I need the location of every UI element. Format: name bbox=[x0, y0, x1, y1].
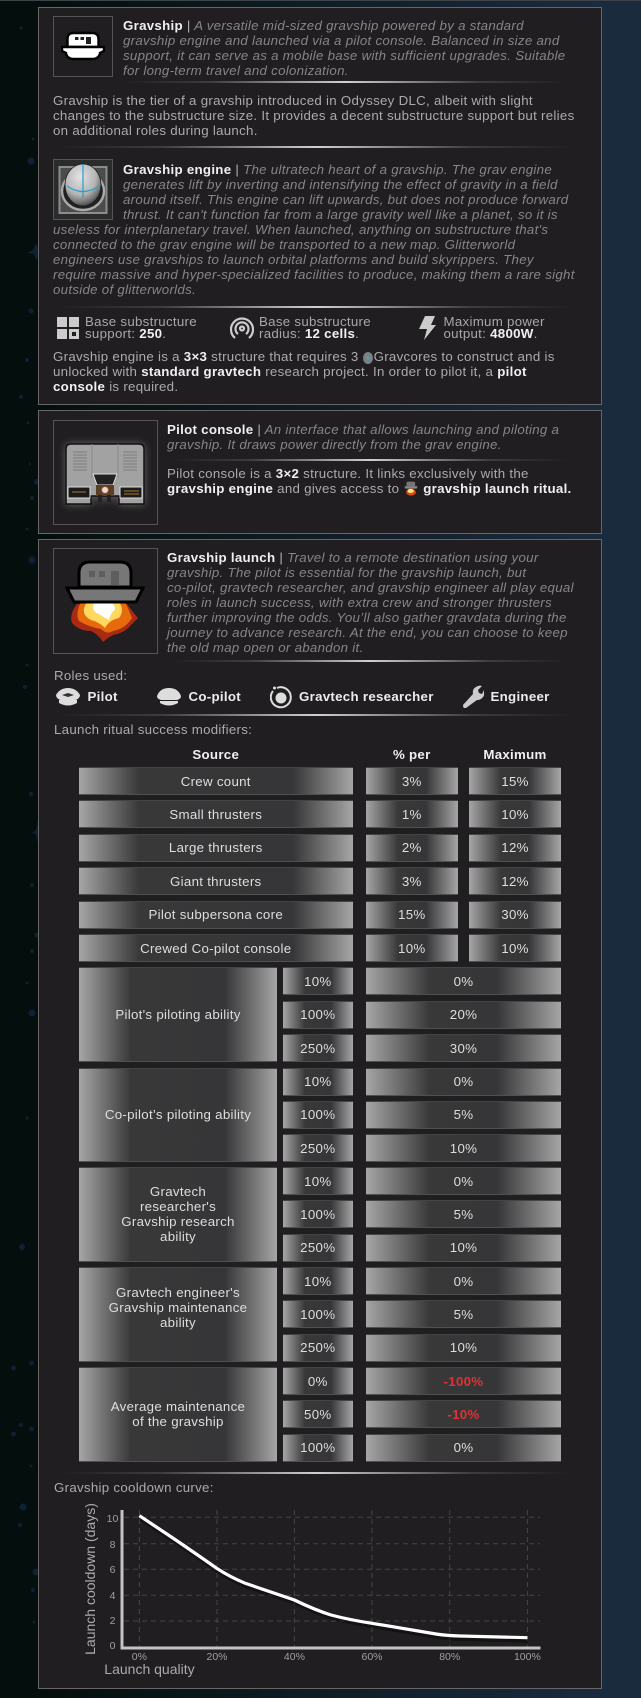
text: substructure support: support: 250. bbox=[85, 326, 166, 341]
table row: small thrusters bbox=[79, 800, 561, 828]
panel: gravship and engine bbox=[38, 7, 602, 405]
header: maximum: Maximum bbox=[483, 746, 547, 762]
table row: giant thrusters bbox=[79, 867, 561, 895]
icon: pilot console bbox=[53, 420, 158, 525]
text: cooldown curve heading: Gravship cooldown curve: bbox=[54, 1480, 214, 1494]
text: gravship engine description: connected to the grav engine will be transported to a new map. Glitterworld bbox=[53, 236, 515, 252]
line chart: launch cooldown vs launch quality: 6 bbox=[110, 1564, 116, 1576]
table group: co-pilot's piloting ability: 10% bbox=[450, 1141, 477, 1156]
table group: gravtech researcher's research ability: 10% bbox=[304, 1174, 331, 1188]
table row: crewed co-pilot console bbox=[79, 934, 561, 962]
table group: average maintenance: of the gravship bbox=[132, 1414, 224, 1429]
table group: gravtech engineer's maintenance ability: 0% bbox=[454, 1274, 473, 1288]
text: pilot: Pilot bbox=[88, 689, 118, 704]
table row: crew count bbox=[79, 767, 561, 795]
table group: gravtech researcher's research ability: 5% bbox=[454, 1207, 473, 1222]
table row: large thrusters: 2% bbox=[402, 840, 422, 855]
table group: co-pilot's piloting ability: 250% bbox=[300, 1141, 335, 1156]
table row: crewed co-pilot console: Crewed Co-pilot console bbox=[140, 940, 291, 956]
icon: substructure radius bbox=[230, 317, 254, 339]
line chart: launch cooldown vs launch quality: 8 bbox=[110, 1539, 116, 1551]
table group: gravtech engineer's maintenance ability: Gravtech engineer's bbox=[116, 1285, 240, 1300]
text: gravship tier note: Gravship is the tier of a gravship introduced in Odyssey DLC, albeit with slight bbox=[53, 92, 533, 108]
table group: co-pilot's piloting ability: 0% bbox=[454, 1074, 473, 1089]
panel: gravship launch bbox=[38, 539, 602, 1689]
table group: gravtech researcher's research ability: 0% bbox=[454, 1174, 473, 1188]
icon: gravtech researcher bbox=[270, 686, 292, 708]
table group: gravtech researcher's research ability: Gravship research bbox=[121, 1214, 235, 1229]
table group: gravtech researcher's research ability: 100% bbox=[300, 1207, 335, 1222]
table row: pilot subpersona core: 15% bbox=[398, 907, 425, 922]
text: maximum power: Maximum power bbox=[444, 314, 545, 329]
table row: crew count: 15% bbox=[501, 774, 529, 788]
table group: pilot's piloting ability: 10% bbox=[304, 974, 331, 989]
table group: pilot's piloting ability bbox=[79, 967, 561, 1062]
text: gravship launch description: gravship. The pilot is essential for the gravship launch, but bbox=[167, 564, 526, 580]
table group: co-pilot's piloting ability bbox=[79, 1068, 561, 1162]
table row: small thrusters: 1% bbox=[402, 807, 422, 822]
line chart: launch cooldown vs launch quality: 0% bbox=[132, 1651, 147, 1663]
table group: gravtech engineer's maintenance ability: 100% bbox=[300, 1307, 335, 1322]
table group: gravtech researcher's research ability: 250% bbox=[300, 1240, 335, 1255]
table row: crewed co-pilot console: 10% bbox=[501, 940, 529, 956]
table row: crew count: Crew count bbox=[181, 774, 251, 788]
text: gravship launch description: Gravship launch | Travel to a remote destination using your bbox=[167, 550, 539, 564]
text: gravship engine description: require massive and hyper-specialized facilities to produce, making them a rare sight bbox=[53, 266, 575, 282]
table group: average maintenance: -100% bbox=[444, 1374, 483, 1388]
table group: average maintenance bbox=[79, 1367, 561, 1462]
text: gravship launch description bbox=[166, 550, 574, 654]
table group: gravtech researcher's research ability bbox=[79, 1167, 561, 1262]
table row: large thrusters: Large thrusters bbox=[169, 840, 263, 855]
top edge strip bbox=[0, 0, 641, 1]
table group: gravtech engineer's maintenance ability: 250% bbox=[300, 1340, 335, 1355]
line chart: launch cooldown vs launch quality: Launch quality bbox=[104, 1661, 195, 1677]
table group: co-pilot's piloting ability: Co-pilot’s piloting ability bbox=[105, 1107, 251, 1122]
table group: co-pilot's piloting ability: 100% bbox=[300, 1107, 335, 1122]
text: gravship launch description: journey to advance research. At the end, you can choose to keep bbox=[167, 624, 568, 640]
table row: crewed co-pilot console: 10% bbox=[398, 940, 425, 956]
table row: giant thrusters: 3% bbox=[402, 874, 422, 889]
text: substructure radius: radius: 12 cells. bbox=[259, 326, 359, 341]
table group: gravtech researcher's research ability: researcher's bbox=[140, 1199, 216, 1214]
panel: pilot console bbox=[38, 410, 602, 534]
text: gravship tier note: changes to the substructure size. It provides a decent substructure support but relies bbox=[53, 108, 575, 122]
text: engine construction note bbox=[53, 348, 555, 394]
table group: pilot's piloting ability: 0% bbox=[454, 974, 473, 989]
text: pilot console description bbox=[167, 422, 559, 452]
table group: average maintenance: -10% bbox=[447, 1407, 480, 1422]
text: engine construction note: unlocked with standard gravtech research project. In order to pilot it, a pilot bbox=[53, 364, 527, 378]
line chart: launch cooldown vs launch quality: 100% bbox=[514, 1651, 541, 1663]
table group: gravtech engineer's maintenance ability: Gravship maintenance bbox=[109, 1300, 247, 1315]
text: gravship engine description: Gravship engine | The ultratech heart of a gravship. The grav engine bbox=[123, 162, 552, 176]
text: gravship launch description: roles in launch success, with extra crew and stronger thrusters bbox=[167, 594, 552, 610]
table row: large thrusters bbox=[79, 834, 561, 862]
text: pilot console description: gravship. It draws power directly from the grav engine. bbox=[167, 436, 502, 452]
table group: gravtech researcher's research ability: Gravtech bbox=[150, 1184, 206, 1199]
icon: pilot cap bbox=[56, 688, 80, 706]
table group: pilot's piloting ability: 20% bbox=[450, 1007, 477, 1022]
table row: large thrusters: 12% bbox=[501, 840, 529, 855]
table group: gravtech researcher's research ability: 10% bbox=[450, 1240, 477, 1255]
text: pilot console note: Pilot console is a 3×2 structure. It links exclusively with the bbox=[167, 466, 529, 481]
text: substructure support: Base substructure bbox=[85, 314, 197, 329]
table row: pilot subpersona core bbox=[79, 901, 561, 929]
table row: giant thrusters: 12% bbox=[501, 874, 529, 889]
text: maximum power: output: 4800W. bbox=[444, 326, 538, 341]
line chart: launch cooldown vs launch quality: 80% bbox=[439, 1651, 460, 1663]
table group: gravtech engineer's maintenance ability bbox=[79, 1267, 561, 1362]
roles row bbox=[56, 686, 550, 708]
table group: average maintenance: 100% bbox=[300, 1440, 335, 1455]
text: gravship description: gravship engine and launched via a pilot console. Balanced in size and bbox=[123, 32, 560, 48]
line chart: launch cooldown vs launch quality: 40% bbox=[284, 1651, 305, 1663]
table group: co-pilot's piloting ability: 10% bbox=[304, 1074, 331, 1089]
text: gravship tier note: on additional roles during launch. bbox=[53, 122, 258, 138]
text: gravship engine description bbox=[53, 162, 575, 296]
table group: average maintenance: 50% bbox=[304, 1407, 331, 1422]
icon: engineer wrench bbox=[463, 686, 484, 708]
table group: pilot's piloting ability: 100% bbox=[300, 1007, 335, 1022]
line chart: launch cooldown vs launch quality: 20% bbox=[206, 1651, 228, 1663]
line chart: launch cooldown vs launch quality: 4 bbox=[110, 1590, 116, 1602]
text: gravship launch description: co-pilot, gravtech researcher, and gravship engineer all play equal bbox=[167, 580, 574, 594]
text: gravship description: for long-term travel and colonization. bbox=[123, 62, 349, 78]
text: co-pilot: Co-pilot bbox=[188, 689, 241, 704]
text: engine construction note: Gravship engine is a 3×3 structure that requires 3 Gravcores to construct and is bbox=[53, 348, 555, 364]
text: maximum power bbox=[444, 314, 545, 341]
text: gravship launch description: further improving the odds. You’ll also gather gravdata during the bbox=[167, 610, 567, 624]
line chart: launch cooldown vs launch quality: 10 bbox=[107, 1513, 118, 1525]
table group: gravtech engineer's maintenance ability: ability bbox=[160, 1315, 196, 1330]
line chart: launch cooldown vs launch quality: 60% bbox=[361, 1651, 383, 1663]
icon: gravship bbox=[53, 16, 113, 77]
text: success modifiers heading: Launch ritual success modifiers: bbox=[54, 722, 252, 736]
text: gravship engine description: engineers use gravships to launch orbital platforms and build skyrippers. They bbox=[53, 252, 534, 266]
text: gravship engine description: generates lift by inverting and intensifying the effect of gravity in a field bbox=[123, 176, 558, 192]
table header bbox=[192, 746, 547, 762]
icon: co-pilot cap bbox=[157, 688, 181, 706]
text: gravship description bbox=[123, 18, 565, 78]
text: gravtech researcher: Gravtech researcher bbox=[299, 689, 434, 704]
table row: pilot subpersona core: 30% bbox=[501, 907, 529, 922]
text: gravship launch description: the old map open or abandon it. bbox=[167, 640, 363, 654]
table group: average maintenance: 0% bbox=[454, 1440, 473, 1455]
table row: small thrusters: Small thrusters bbox=[169, 807, 262, 822]
text: pilot console note bbox=[167, 466, 572, 496]
line chart: launch cooldown vs launch quality: 0 bbox=[110, 1640, 116, 1652]
line chart: launch cooldown vs launch quality: 2 bbox=[110, 1615, 116, 1627]
text: substructure support bbox=[85, 314, 197, 341]
icon: gravship engine bbox=[53, 159, 113, 220]
table group: gravtech engineer's maintenance ability: 10% bbox=[304, 1274, 331, 1288]
icon: power bolt bbox=[419, 316, 436, 340]
table row: crew count: 3% bbox=[402, 774, 422, 788]
table group: pilot's piloting ability: Pilot's piloting ability bbox=[115, 1007, 241, 1022]
table group: pilot's piloting ability: 30% bbox=[450, 1041, 477, 1056]
text: gravship engine description: thrust. It can't function far from a large gravity well like a planet, so it is bbox=[123, 206, 558, 222]
text: gravship tier note bbox=[53, 92, 575, 138]
text: pilot console note: gravship engine and gives access to gravship launch ritual. bbox=[167, 481, 572, 496]
table group: average maintenance: Average maintenance bbox=[111, 1399, 245, 1414]
text: engine construction note: console is required. bbox=[53, 378, 178, 394]
table group: pilot's piloting ability: 250% bbox=[300, 1041, 335, 1056]
icon: gravship launch bbox=[53, 548, 158, 654]
text: gravship description: Gravship | A versatile mid-sized gravship powered by a standard bbox=[123, 18, 524, 32]
table group: average maintenance: 0% bbox=[308, 1374, 328, 1388]
table row: small thrusters: 10% bbox=[501, 807, 529, 822]
text: substructure radius bbox=[259, 314, 371, 341]
header: source: Source bbox=[192, 746, 239, 762]
table group: co-pilot's piloting ability: 5% bbox=[454, 1107, 473, 1122]
text: gravship description: support, it can serve as a mobile base with sufficient upgrades. Suitable bbox=[123, 48, 565, 62]
text: substructure radius: Base substructure bbox=[259, 314, 371, 329]
line chart: launch cooldown vs launch quality bbox=[82, 1503, 541, 1677]
text: gravship engine description: around itself. This engine can lift upwards, but does not produce forward bbox=[123, 192, 568, 206]
table group: gravtech researcher's research ability: ability bbox=[160, 1229, 196, 1244]
table row: giant thrusters: Giant thrusters bbox=[170, 874, 261, 889]
header: percent per: % per bbox=[393, 746, 431, 762]
text: roles used heading: Roles used: bbox=[54, 668, 127, 682]
text: gravship engine description: useless for interplanetary travel. When launched, anything on substructure that's bbox=[53, 222, 548, 236]
table group: gravtech engineer's maintenance ability: 10% bbox=[450, 1340, 477, 1355]
icon: substructure support bbox=[57, 317, 79, 339]
text: pilot console description: Pilot console | An interface that allows launching and piloting a bbox=[167, 422, 559, 436]
line chart: launch cooldown vs launch quality: Launch cooldown (days) bbox=[82, 1503, 98, 1655]
table row: pilot subpersona core: Pilot subpersona core bbox=[148, 907, 283, 922]
table group: gravtech engineer's maintenance ability: 5% bbox=[454, 1307, 473, 1322]
text: gravship engine description: outside of glitterworlds. bbox=[53, 282, 196, 296]
text: engineer: Engineer bbox=[490, 689, 550, 704]
